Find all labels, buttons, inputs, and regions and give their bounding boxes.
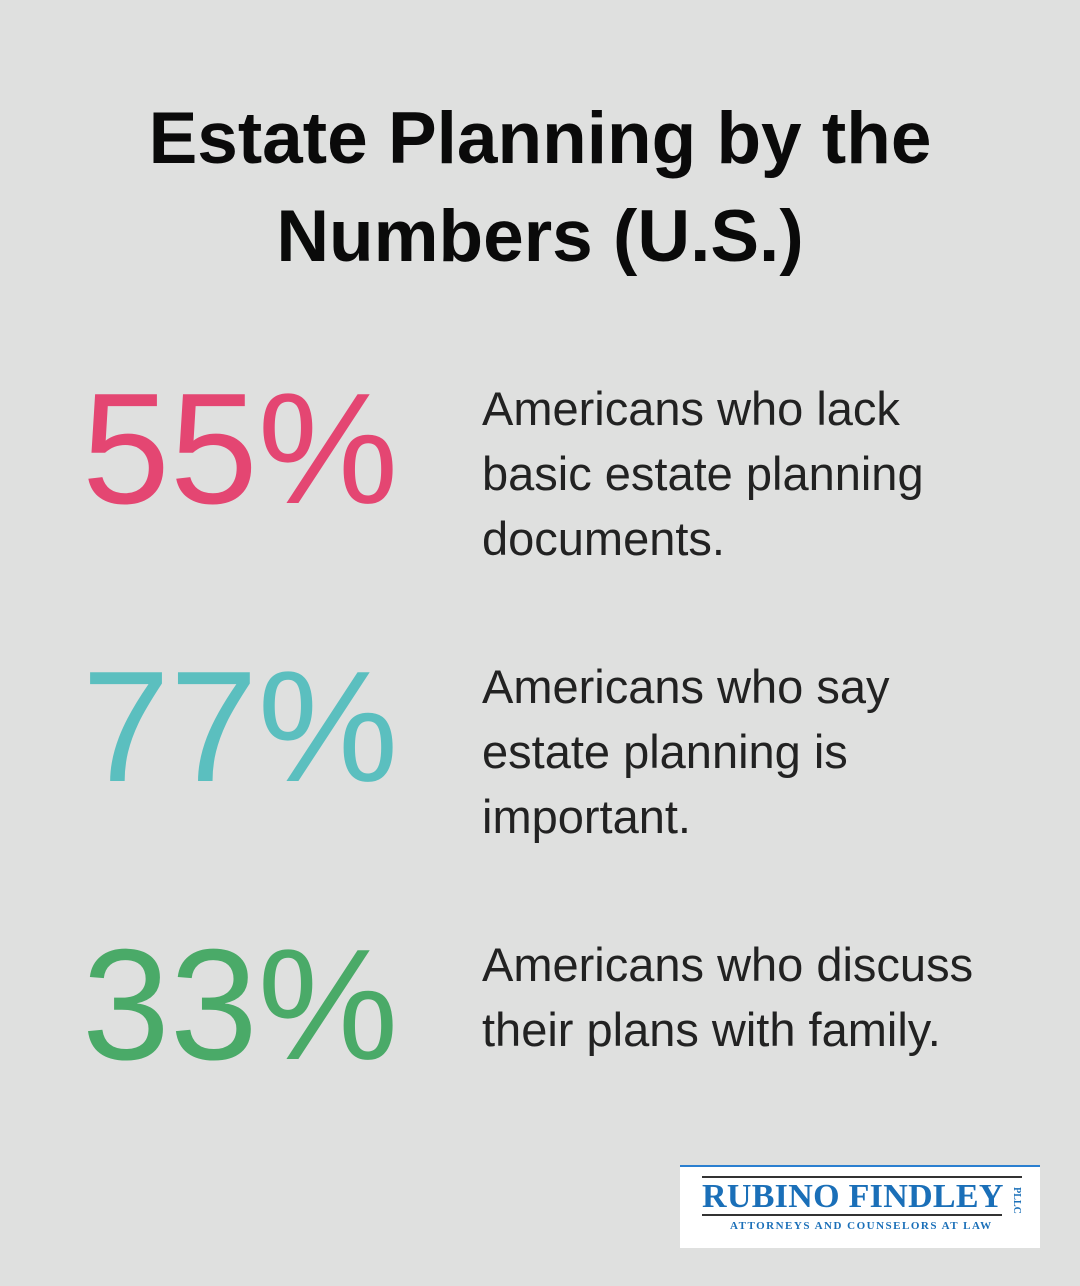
stat 3 number: 33% [82, 917, 398, 1093]
stat 1 text: documents. [482, 512, 725, 565]
logo: RUBINO FINDLEY [702, 1178, 1004, 1215]
stat 3 text [482, 938, 973, 1056]
stat 2 text: estate planning is [482, 725, 848, 778]
stat 3 text: Americans who discuss [482, 938, 973, 991]
stat 1 text: basic estate planning [482, 447, 924, 500]
stat 2 number: 77% [82, 639, 398, 815]
stat 1 number: 55% [82, 361, 398, 537]
stat 3 text: their plans with family. [482, 1003, 941, 1056]
stat 1 text [482, 382, 924, 565]
title: Estate Planning by the [149, 98, 931, 179]
stat 2 text: important. [482, 790, 691, 843]
title: Numbers (U.S.) [276, 196, 804, 277]
stat 2 text [482, 660, 890, 843]
stat 2 text: Americans who say [482, 660, 890, 713]
logo: PLLC [1011, 1187, 1022, 1214]
stat 1 text: Americans who lack [482, 382, 900, 435]
title [149, 98, 931, 277]
logo [680, 1165, 1040, 1248]
logo: ATTORNEYS AND COUNSELORS AT LAW [730, 1220, 993, 1232]
